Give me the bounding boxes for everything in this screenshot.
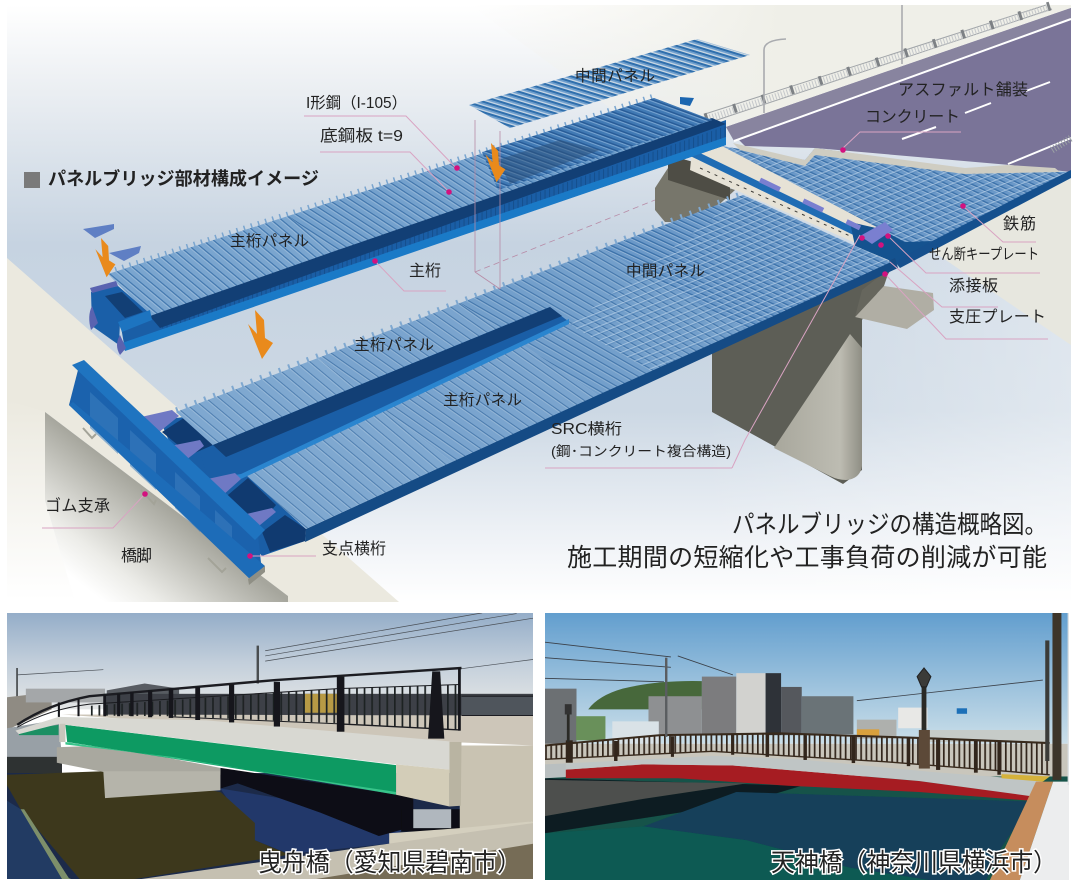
label: main girder panel upper: 主桁パネル [230,232,309,250]
label: support cross girder: 支点横桁 [322,540,386,558]
background: left ground top face [7,258,399,602]
background: left ground fade [7,400,75,602]
lower main girder panels and middle panel [176,193,891,529]
background: right lightening [700,180,1071,602]
middle panel floating [469,39,750,128]
road surface [726,8,1071,172]
caption: Hikifune bridge: 曳舟橋（愛知県碧南市） [258,849,521,877]
description text: パネルブリッジの構造概略図。 [732,511,1047,539]
background: ground below road [925,172,1071,345]
lower girder interior and cross connections [160,414,306,556]
girder flange top end [680,97,694,106]
label: splice plate: 添接板 [949,277,998,295]
caption: Tenjin bridge: 天神橋（神奈川県横浜市） [771,849,1057,877]
arrow: lower panel down [248,310,273,359]
photo: Hikifune bridge [0,606,551,886]
lower main girder in slot [200,307,569,480]
upper main girder [120,118,726,351]
arrow: left panel down [95,238,115,277]
rebar deck gap [690,146,932,264]
light pole [764,39,786,113]
shear key plate [860,222,893,244]
slot under middle panel [482,98,712,190]
utility pole [901,5,903,64]
label: rebar: 鉄筋 [1003,215,1036,233]
label: main girder: 主桁 [409,262,441,280]
background: upper-right ground [470,5,1071,130]
photo: Tenjin bridge [540,606,1080,886]
pier front face [45,412,288,602]
far slab with concrete edge [722,143,1071,268]
label: bottom steel plate: 底鋼板 t=9 [320,127,403,145]
shadow at slot end [497,140,600,184]
description text: 施工期間の短縮化や工事負荷の削減が可能 [567,544,1047,572]
label: main girder panel lower: 主桁パネル [443,391,522,409]
label: pier: 橋脚 [121,547,152,565]
leader lines [42,116,1048,556]
rubber bearings [83,428,226,572]
label: I-beam: I形鋼（I-105） [306,94,407,112]
description text [567,511,1047,572]
label: bearing plate: 支圧プレート [949,308,1046,326]
front flange of slab [305,258,898,542]
dashed assembly guide lines [475,120,655,289]
upper main girder panel [108,96,712,316]
label: middle panel top: 中間パネル [575,67,655,85]
label: shear key plate: せん断キープレート [929,246,1039,263]
panel: structural diagram [7,5,1071,602]
back pier [655,155,735,222]
label: middle panel lower: 中間パネル [626,262,705,280]
title: パネルブリッジ部材構成イメージ [48,168,319,189]
leader dots [142,147,966,559]
gusset plates on cross girder [141,410,276,530]
arrow: upper panel down [485,143,505,182]
label: SRC cross girder: SRC横桁 [551,420,622,438]
main pier [712,262,934,484]
left girder end pieces [89,281,152,355]
label: composite structure note: (鋼･コンクリート複合構造) [551,443,731,459]
legend square [24,172,40,188]
label: concrete: コンクリート [865,108,960,126]
label: asphalt: アスファルト舗装 [898,81,1028,99]
gusset plates floating [83,224,141,261]
label: rubber bearing: ゴム支承 [45,496,110,515]
road railing [705,5,1071,150]
label: main girder panel middle: 主桁パネル [354,336,434,354]
diagram background [7,5,1071,602]
support cross girder [69,360,265,585]
